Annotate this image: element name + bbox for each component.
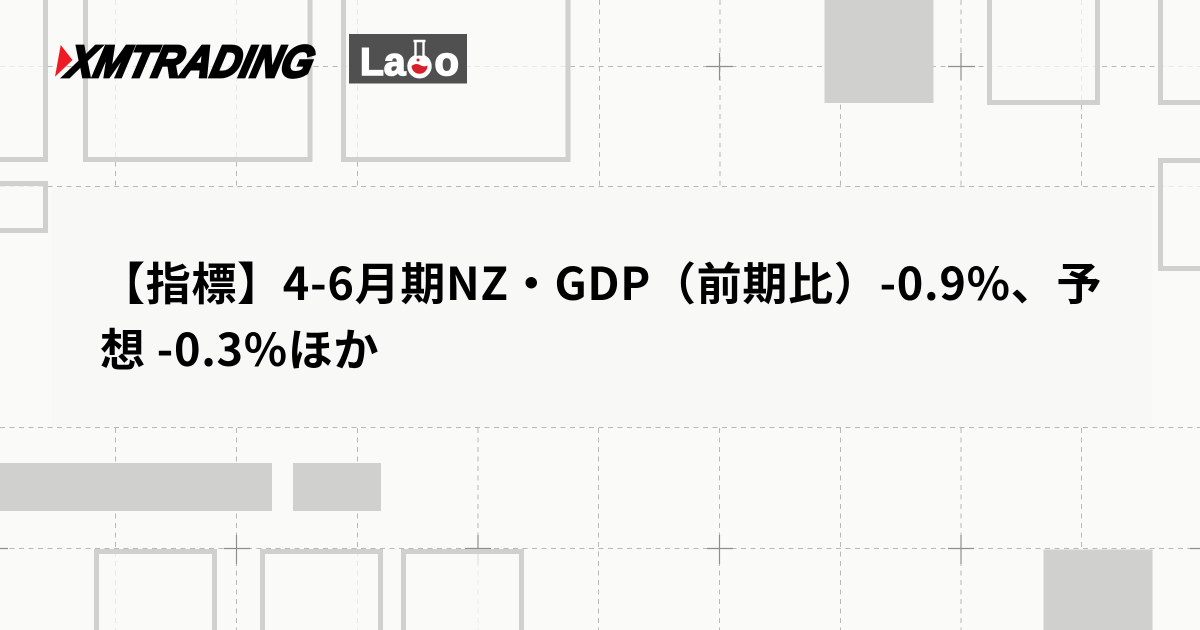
heading: article title: 【指標】4-6月期NZ・GDP（前期比）-0.9%、予 [100, 248, 1102, 313]
logo text: La: La [360, 41, 406, 84]
panel: title background [52, 187, 1152, 427]
logo text: o: o [434, 40, 459, 84]
icon: flask [408, 41, 430, 77]
logo: XMTRADING [55, 38, 320, 84]
heading: article title: 想 -0.3%ほか [100, 314, 379, 379]
heading: article title [100, 248, 1102, 379]
icon: red triangle [55, 45, 72, 77]
logo: Labo [349, 34, 467, 84]
